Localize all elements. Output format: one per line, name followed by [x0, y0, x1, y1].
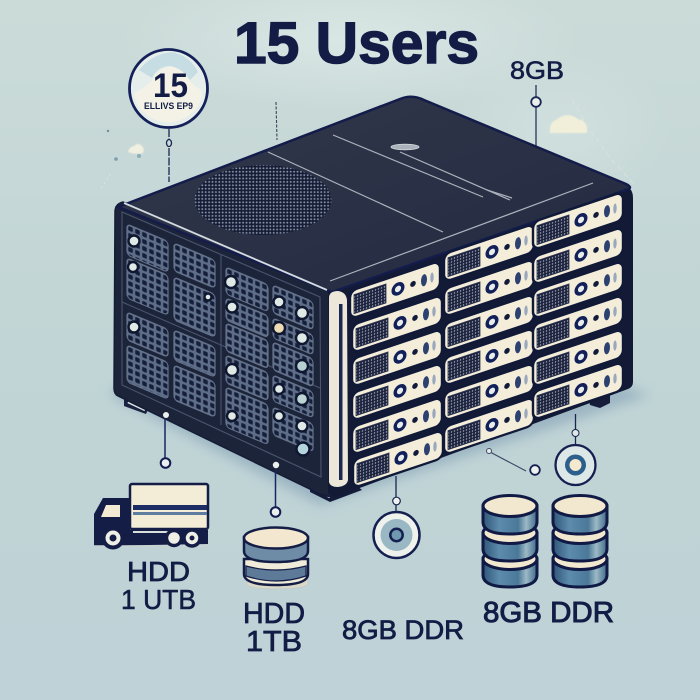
label: 8GB top: 8GB	[510, 57, 564, 85]
label: HDD 1UTB: HDD	[127, 556, 190, 587]
icon: RAM stack left	[483, 496, 537, 587]
badge: 15 users: ELLIVS EP9	[144, 101, 193, 112]
connector: lower disc	[393, 476, 400, 512]
icon: HDD stack	[244, 528, 308, 589]
foot: front-left	[124, 398, 150, 414]
top grille	[194, 165, 332, 235]
connector: diagonal	[486, 448, 540, 475]
top panel seams	[268, 135, 593, 281]
connector: badge to server	[166, 129, 172, 182]
icon: truck	[94, 484, 209, 548]
left face grid panels	[127, 224, 313, 452]
badge: 15 users: 15	[153, 67, 188, 105]
small cloud and specks	[101, 130, 144, 188]
server right face	[328, 186, 633, 496]
icon: lower disc	[374, 512, 420, 558]
title: 15 Users	[234, 11, 479, 76]
left face dividers	[122, 255, 320, 425]
server	[114, 97, 633, 502]
icon: upper disc	[556, 445, 596, 485]
server top face	[118, 97, 630, 292]
faint dashes right	[572, 100, 635, 185]
connector: truck	[161, 412, 170, 468]
badge: 15 users	[130, 50, 208, 128]
label: HDD 1UTB	[121, 556, 196, 615]
foot: front-bottom	[310, 480, 362, 502]
icon: RAM stack right	[553, 496, 607, 587]
drive bays: column 3	[533, 192, 623, 420]
label: HDD 1UTB: 1 UTB	[121, 584, 196, 615]
drive bays: column 2	[444, 224, 534, 455]
connector: HDD stack	[271, 462, 280, 517]
left face indicator lights	[128, 236, 310, 456]
left face inset frame	[122, 212, 321, 477]
server left face	[114, 202, 340, 497]
foot: right	[588, 392, 610, 408]
connector: upper disc	[572, 414, 579, 445]
label: 8GB DDR left: 8GB DDR	[342, 615, 464, 645]
label: HDD 1TB: 1TB	[246, 626, 302, 658]
left face highlight edge	[124, 203, 327, 290]
connector: 8GB to server	[531, 85, 541, 148]
label: 8GB DDR right: 8GB DDR	[483, 597, 614, 629]
label: HDD 1TB	[243, 598, 305, 658]
drive bays: column 1	[350, 261, 443, 488]
label: HDD 1TB: HDD	[243, 598, 305, 630]
shadow under server	[110, 385, 650, 505]
corner bezel strip	[329, 291, 348, 487]
top highlight oval	[391, 144, 419, 150]
cloud right	[550, 115, 587, 133]
dashed marker line	[276, 102, 277, 140]
